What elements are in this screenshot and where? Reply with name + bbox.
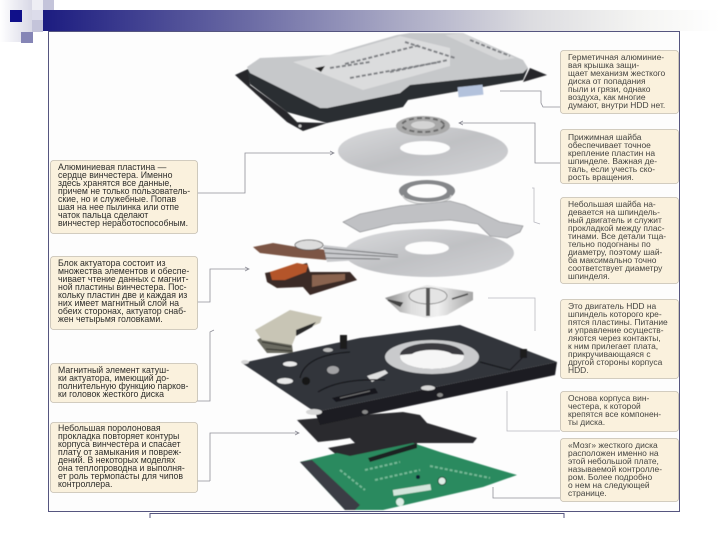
callout: controller: этой небольшой плате, <box>568 456 659 466</box>
arrow: platter callout <box>197 151 334 193</box>
callout: cover: Герметичная алюминие- <box>568 52 664 62</box>
part: top cover <box>235 33 547 131</box>
callout: base: ты диска. <box>568 417 605 427</box>
slide frame <box>48 32 680 512</box>
part: shield plate <box>343 201 523 238</box>
callout: clamp washer: шпинделе. Важная де- <box>568 156 657 166</box>
callout: spacer washer: ба максимально точно <box>568 255 657 265</box>
callout: spacer washer: девается на шпиндель- <box>568 207 660 217</box>
part: spindle motor <box>385 285 473 318</box>
second bottom line <box>150 513 564 518</box>
illustration: exploded hard drive <box>235 33 557 510</box>
decorative corner squares <box>0 0 54 43</box>
callout: spacer washer: шпинделя. <box>568 271 610 281</box>
arrow: magnet callout <box>197 330 214 401</box>
callout: spacer washer <box>560 198 678 284</box>
callout: spacer washer: прокладкой между плас- <box>568 223 665 233</box>
callout: motor: HDD. <box>568 365 589 375</box>
callout: actuator block: жен четырьмя головками. <box>58 314 163 324</box>
callout: controller: странице. <box>568 488 607 498</box>
callout: magnet: ки актуатора, имеющий до- <box>58 373 169 383</box>
callout: aluminium platter: шая на нее пылинка или отпе <box>58 202 179 212</box>
part: clamp washer <box>396 116 450 136</box>
callout: actuator block <box>50 256 198 330</box>
callout: cover: щает механизм жесткого <box>568 68 666 78</box>
callout: foam gasket: ет роль термопасты для чипов <box>58 471 183 481</box>
part: lower platter <box>344 229 514 277</box>
callout: magnet <box>50 364 198 402</box>
arrow: base callout <box>507 391 560 431</box>
callout: cover: вая крышка защи- <box>568 60 639 70</box>
callout: aluminium platter: ские, но и служебные. Попав <box>58 194 176 204</box>
arrow: board callout <box>493 487 560 498</box>
part: controller board <box>300 443 517 510</box>
callout: motor: ляются через контакты, <box>568 333 661 343</box>
callout: actuator block: чивает чтение данных с магнит- <box>58 274 189 284</box>
part: actuator magnet <box>255 310 322 353</box>
part: upper platter <box>338 126 508 176</box>
part: spacer ring <box>399 180 455 204</box>
callout: actuator block: обеих сторонах, актуатор снаб- <box>58 306 186 316</box>
callout: base: честера, к которой <box>568 401 641 411</box>
callout: controller: называемой контролле- <box>568 464 662 474</box>
callout: controller <box>560 438 678 502</box>
arrow: spacer callout <box>532 188 540 224</box>
callout: controller: ром. Более подробно <box>568 472 652 482</box>
callout: spacer washer: диаметру, поэтому шай- <box>568 247 663 257</box>
callout: motor: другой стороны корпуса <box>568 357 663 367</box>
callout: motor: к ним прилегает плата, <box>568 341 658 351</box>
callout: spacer washer: Небольшая шайба на- <box>568 199 656 209</box>
callout: base <box>560 392 678 432</box>
part: actuator <box>253 240 398 295</box>
callout: motor: и управление осуществ- <box>568 325 664 335</box>
callout: actuator block: ной пластины винчестера. Пос- <box>58 282 187 292</box>
arrow: foam callout <box>197 431 299 481</box>
header gradient bar <box>43 10 720 31</box>
arrow: motor callout <box>488 298 535 331</box>
callout: cover: думают, внутри HDD нет. <box>568 100 665 110</box>
callout: actuator block: них имеет магнитный слой на <box>58 298 179 308</box>
callout: magnet: Магнитный элемент катуш- <box>58 365 169 375</box>
callout: foam gasket: контроллера. <box>58 479 112 489</box>
callout: foam gasket <box>50 422 198 492</box>
callout: motor: пятся пластины. Питание <box>568 317 668 327</box>
callout: clamp washer: Прижимная шайба <box>568 132 642 142</box>
callout: spacer washer: соответствует диаметру <box>568 263 663 273</box>
callout: aluminium platter: Алюминиевая пластина — <box>58 162 167 172</box>
callout: motor <box>560 300 678 378</box>
callout: clamp washer <box>560 130 678 184</box>
callout: cover: пыли и грязи, однако <box>568 84 651 94</box>
callout: motor: Это двигатель HDD на <box>568 301 657 311</box>
arrow: actuator callout <box>197 267 249 302</box>
callout: actuator block: Блок актуатора состоит из <box>58 258 165 268</box>
callout: clamp washer: обеспечивает точное <box>568 140 651 150</box>
callout: cover: диска от попадания <box>568 76 646 86</box>
callout: actuator block: множества элементов и обеспе- <box>58 266 189 276</box>
connector lines <box>197 91 560 498</box>
callout: foam gasket: она теплопроводна и выполня- <box>58 463 185 473</box>
callout: controller: «Мозг» жесткого диска <box>568 440 658 450</box>
callout: controller: о нем на следующей <box>568 480 650 490</box>
callout: aluminium platter: причем не только пользователь- <box>58 186 190 196</box>
callout: aluminium platter: чаток пальца сделают <box>58 210 148 220</box>
callout: clamp washer: рость вращения. <box>568 172 634 182</box>
callout: actuator block: кольку пластин две и каждая из <box>58 290 187 300</box>
callout: magnet: полнительную функцию парков- <box>58 381 189 391</box>
arrow: clamp callout <box>459 121 560 163</box>
callout: foam gasket: Небольшая поролоновая <box>58 423 161 433</box>
callout: clamp washer: таль, если учесть ско- <box>568 164 655 174</box>
callout: cover <box>560 50 678 114</box>
callout: foam gasket: прокладка повторяет контуры <box>58 431 179 441</box>
callout: foam gasket: плату от замыкания и повреж- <box>58 447 182 457</box>
callout: base: Основа корпуса вин- <box>568 393 650 403</box>
callout: base: крепятся все компонен- <box>568 409 661 419</box>
callout: aluminium platter: винчестер неработоспособным. <box>58 218 188 228</box>
callout: aluminium platter: здесь хранятся все данные, <box>58 178 172 188</box>
callout: motor: прикручивающаяся с <box>568 349 651 359</box>
callout: clamp washer: крепление пластин на <box>568 148 655 158</box>
part: foam gasket <box>297 412 477 460</box>
callout: spacer washer: ный двигатель и служит <box>568 215 662 225</box>
callout: foam gasket: дений. В некоторых моделях <box>58 455 176 465</box>
callout: spacer washer: тинами. Все детали тща- <box>568 231 666 241</box>
callout: spacer washer: тельно подогнаны по <box>568 239 651 249</box>
part: base casting <box>241 325 557 425</box>
callout: controller: расположен именно на <box>568 448 659 458</box>
callout: motor: шпиндель которого кре- <box>568 309 662 319</box>
callout: magnet: ки головок жесткого диска <box>58 389 164 399</box>
arrow: cover callout <box>500 91 560 107</box>
callout: cover: воздуха, как многие <box>568 92 646 102</box>
callout: foam gasket: корпуса винчестера и спасает <box>58 439 181 449</box>
callout: aluminium platter: сердце винчестера. Именно <box>58 170 173 180</box>
callout: aluminium platter <box>50 160 198 234</box>
